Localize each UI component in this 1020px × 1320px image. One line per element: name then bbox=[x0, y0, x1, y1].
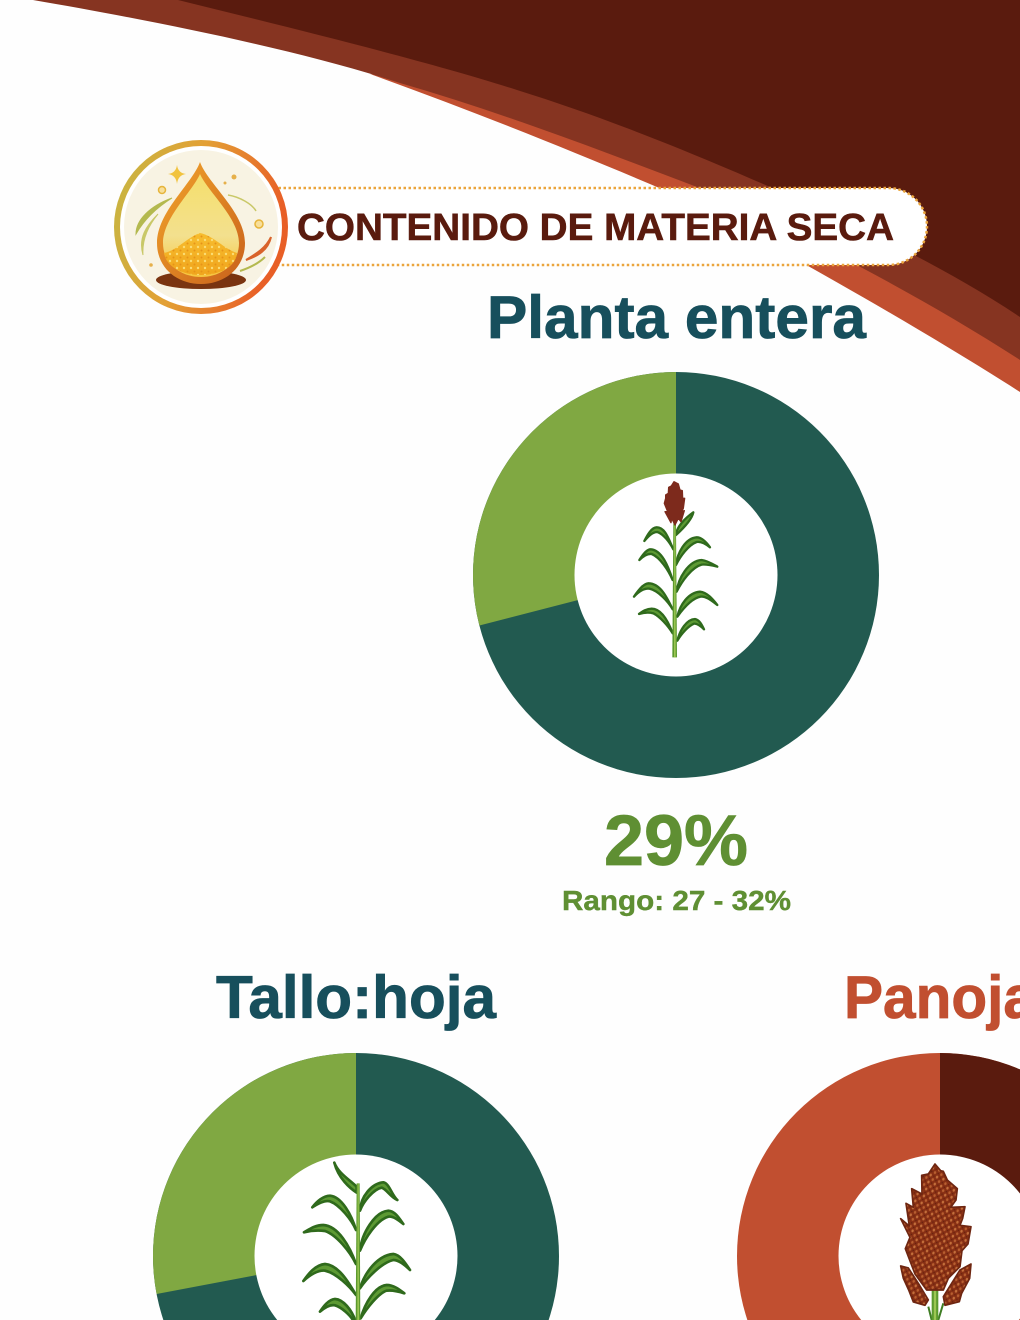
title banner bbox=[200, 188, 927, 265]
value: 29%: 29% bbox=[604, 802, 748, 881]
donut chart: tallo hoja bbox=[153, 1053, 559, 1320]
swoosh: orange layer bbox=[370, 74, 1020, 392]
panel: panoja bbox=[737, 964, 1020, 1320]
swoosh: dark brown layer bbox=[178, 0, 1020, 317]
donut chart: planta entera 29% bbox=[473, 372, 879, 778]
icon: sorghum panicle bbox=[901, 1164, 971, 1320]
swoosh: mid brown layer bbox=[33, 0, 1020, 360]
icon: golden drop badge bbox=[114, 140, 288, 314]
range text: Rango: 27 - 32% bbox=[562, 885, 791, 916]
banner title: CONTENIDO DE MATERIA SECA bbox=[297, 207, 894, 249]
heading: planta entera: Planta entera bbox=[487, 284, 867, 351]
panel: tallo hoja bbox=[153, 964, 559, 1320]
header swoosh bbox=[33, 0, 1020, 392]
icon: sorghum leaves bbox=[303, 1163, 410, 1320]
panel: planta entera bbox=[473, 284, 879, 916]
icon: sorghum plant bbox=[634, 482, 717, 657]
donut chart: panoja bbox=[737, 1053, 1020, 1320]
heading: tallo hoja: Tallo:hoja bbox=[216, 964, 497, 1031]
banner pill bbox=[200, 188, 927, 265]
